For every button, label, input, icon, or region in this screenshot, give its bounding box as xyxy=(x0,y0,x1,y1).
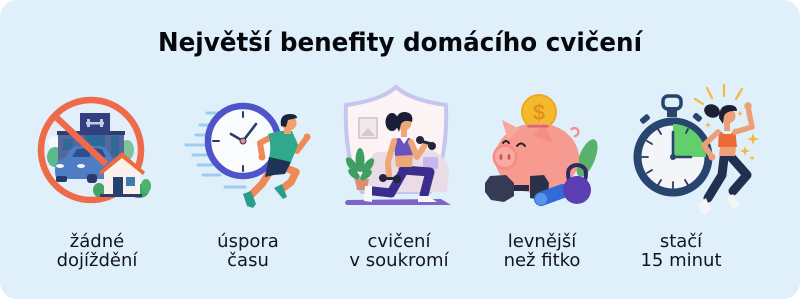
label: cvičení v soukromí: cvičení xyxy=(368,231,431,252)
label: cvičení v soukromí: v soukromí xyxy=(349,250,450,271)
label: žádné dojíždění: dojíždění xyxy=(57,250,138,271)
label: levnější než fitko: levnější xyxy=(508,231,577,252)
icon: no commuting xyxy=(41,100,151,200)
label: úspora času: času xyxy=(227,250,269,271)
icon: privacy shield with lunging woman xyxy=(344,87,451,205)
label: levnější než fitko: než fitko xyxy=(504,250,580,271)
title: Největší benefity domácího cvičení xyxy=(158,28,643,58)
icon: piggy bank with dumbbell: $ xyxy=(533,100,545,125)
label: úspora času: úspora xyxy=(217,231,279,252)
icon: stopwatch and cheering woman xyxy=(638,85,759,215)
label: stačí 15 minut: stačí xyxy=(660,231,703,252)
label: stačí 15 minut: 15 minut xyxy=(640,250,722,271)
icon: clock and runner xyxy=(186,106,310,208)
icon: piggy bank with dumbbell xyxy=(485,95,602,205)
label: žádné dojíždění: žádné xyxy=(70,231,124,252)
